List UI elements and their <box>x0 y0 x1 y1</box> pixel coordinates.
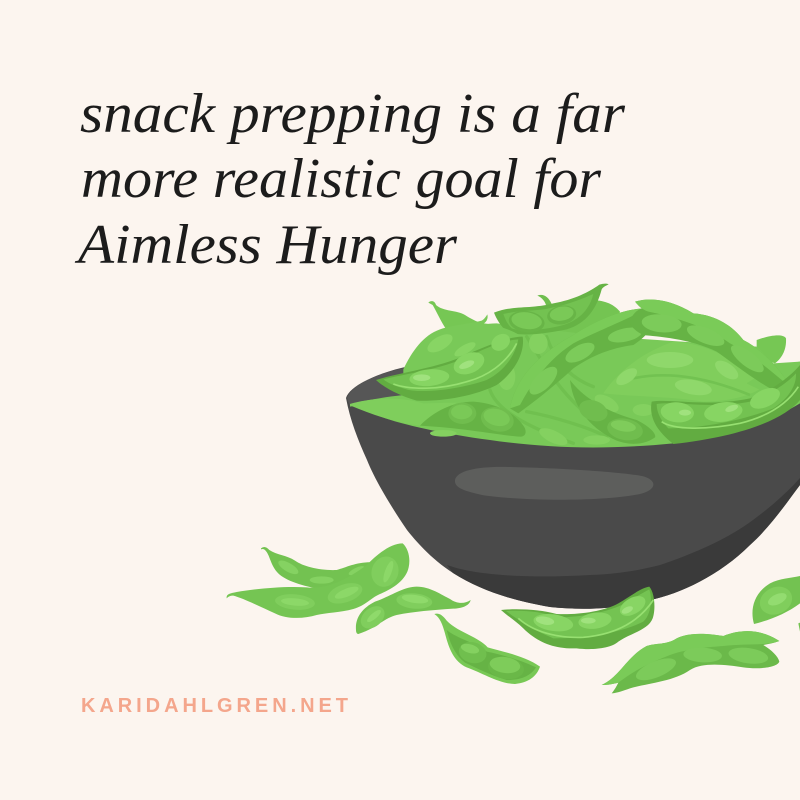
open pod bottom <box>602 631 779 693</box>
arch pod center <box>510 308 651 413</box>
pod center dark <box>570 380 655 444</box>
large pod right back <box>603 342 800 402</box>
scattered pods left group <box>227 543 540 684</box>
bowl <box>346 366 800 609</box>
pod large left <box>376 314 523 401</box>
website label: KARIDAHLGREN.NET <box>81 695 348 717</box>
closed pod right edge <box>752 576 800 632</box>
arch pod right <box>630 299 791 395</box>
pod long left <box>227 543 409 618</box>
title: more realistic goal for <box>81 148 601 210</box>
pile stripes <box>373 337 627 443</box>
pod upper left <box>261 547 373 590</box>
pile highlights <box>387 333 654 449</box>
open pod center <box>501 587 654 649</box>
bowl highlight <box>455 467 653 500</box>
title: snack prepping is a far <box>80 83 625 145</box>
scattered pods right group <box>501 576 800 693</box>
title: Aimless Hunger <box>74 214 457 276</box>
pod top center <box>494 284 609 335</box>
pod open lower <box>434 614 540 684</box>
title <box>74 83 625 276</box>
edamame pile in bowl <box>350 284 800 449</box>
pod lower left <box>350 399 526 437</box>
pod middle <box>356 587 471 634</box>
back pods <box>428 300 786 363</box>
pile mass <box>350 323 800 447</box>
pod bottom right <box>651 365 800 444</box>
